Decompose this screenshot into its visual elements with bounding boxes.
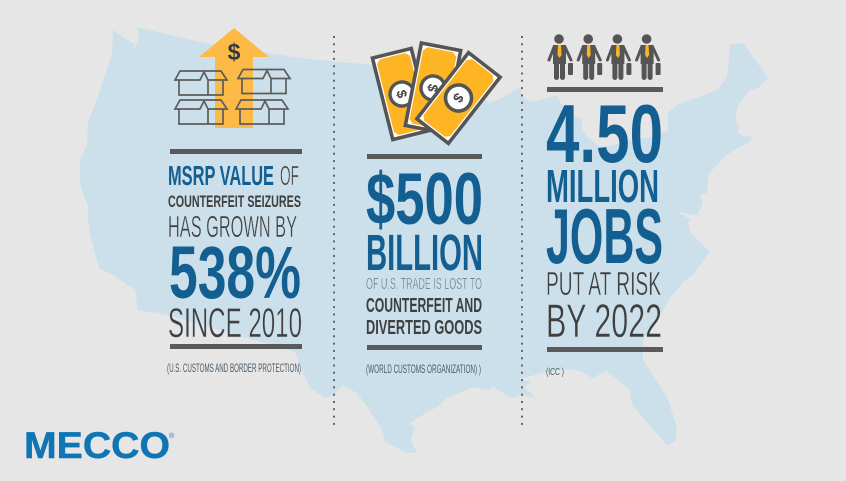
text: has grown by: HAS GROWN BY (168, 209, 297, 244)
bottom rule (367, 345, 482, 350)
source: (ICC ) (546, 367, 564, 378)
stat: $500: $500 (366, 159, 483, 240)
text: since 2010: SINCE 2010 (168, 299, 302, 346)
text: by 2022: BY 2022 (546, 294, 662, 347)
divider: left dotted line (333, 36, 335, 427)
bottom rule (170, 344, 302, 349)
stat: jobs: JOBS (546, 192, 663, 280)
divider: right dotted line (521, 36, 523, 427)
stat: 538%: 538% (169, 231, 301, 314)
icon: up arrow with dollar sign: $ (228, 39, 241, 65)
top rule (367, 154, 482, 159)
stat: 4.50: 4.50 (546, 87, 663, 180)
icon: fanned dollar bills: $ (450, 90, 467, 106)
logo: MECCO: MECCO (24, 425, 170, 466)
bottom rule (547, 347, 663, 352)
top rule (170, 149, 302, 154)
source: (U.S. CUSTOMS AND BORDER PROTECTION) (167, 361, 301, 375)
icon: fanned dollar bills: $ (393, 88, 411, 100)
panel: MSRP value: OF (280, 160, 299, 191)
icon: up arrow with dollar sign (199, 28, 269, 128)
icon: four boxes (175, 70, 290, 124)
text: counterfeit and: COUNTERFEIT AND (366, 295, 482, 317)
text: diverted goods: DIVERTED GOODS (366, 317, 482, 339)
heading: MSRP value of: MSRP VALUE (168, 160, 274, 191)
text: of U.S. trade is lost to: OF U.S. TRADE IS LOST TO (366, 276, 482, 293)
panel: MSRP value (167, 28, 302, 375)
icon: fanned dollar bills: $ (424, 83, 442, 94)
logo: MECCO: ® (169, 432, 175, 440)
stat: million: MILLION (546, 160, 659, 212)
icon: four business people (549, 34, 661, 80)
panel: $500 billion (366, 43, 500, 376)
top rule (547, 87, 663, 92)
icon: fanned dollar bills (372, 43, 500, 143)
source: (WORLD CUSTOMS ORGANIZATION) ) (366, 362, 481, 376)
US map background (80, 27, 768, 453)
text: put at risk: PUT AT RISK (546, 265, 661, 302)
text: counterfeit seizures: COUNTERFEIT SEIZURES (168, 192, 301, 211)
stat: billion: BILLION (366, 224, 483, 281)
panel: 4.50 million jobs (546, 34, 663, 378)
